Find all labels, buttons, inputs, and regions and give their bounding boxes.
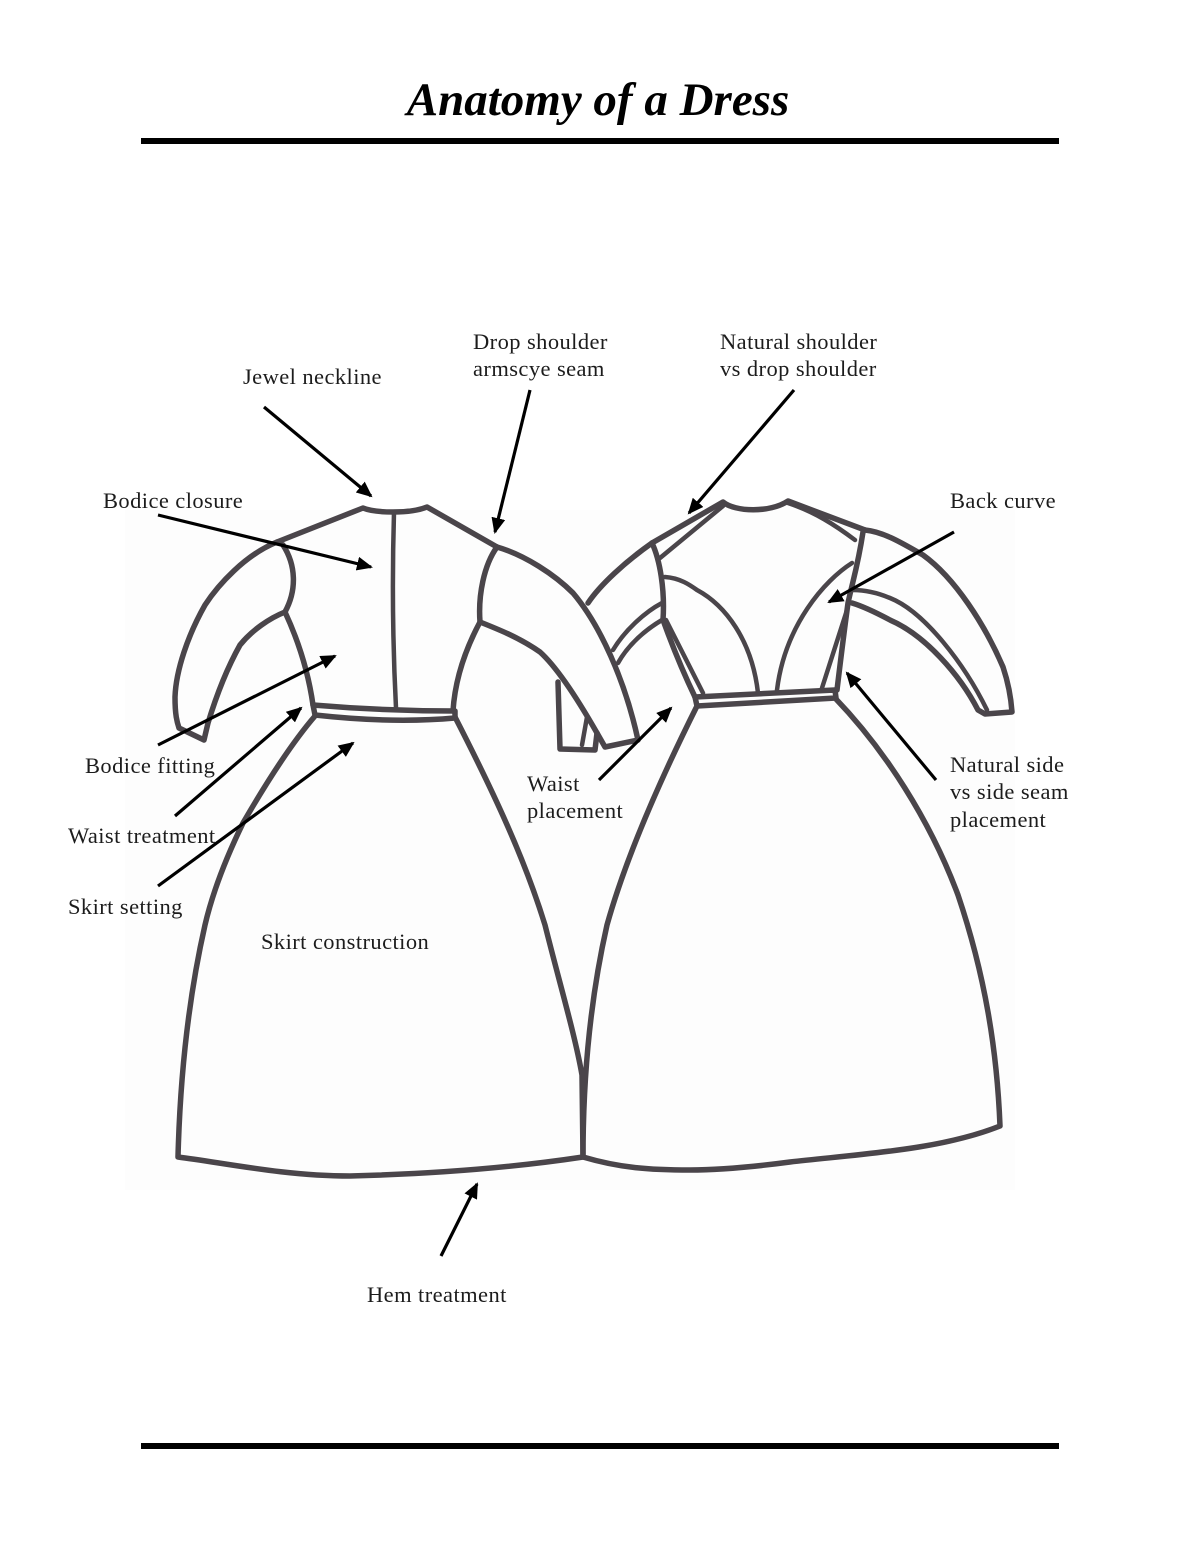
arrow: Bodice fitting	[158, 656, 335, 745]
label: Natural side vs side seam placement: Natural side	[950, 752, 1064, 777]
arrow: Drop shoulder	[495, 390, 530, 532]
front view left sleeve	[175, 542, 285, 740]
paper background	[125, 510, 1015, 1190]
dress: front view	[175, 507, 638, 1176]
arrow: Natural side	[847, 673, 936, 780]
title: Anatomy of a Dress	[404, 74, 789, 126]
label: Drop shoulder armscye seam: Drop shoulder	[473, 329, 608, 354]
arrow: Hem treatment	[441, 1184, 477, 1256]
arrow: Jewel neckline	[264, 407, 371, 496]
arrow: Bodice closure	[158, 515, 371, 567]
front view right sleeve	[480, 547, 638, 747]
label: Hem treatment: Hem treatment	[367, 1282, 507, 1307]
label: Natural shoulder vs drop shoulder: Natural shoulder	[720, 329, 877, 354]
arrow: Skirt setting	[158, 743, 353, 886]
label: Waist treatment: Waist treatment	[68, 823, 216, 848]
label: Skirt setting: Skirt setting	[68, 894, 183, 919]
front view skirt	[178, 716, 583, 1176]
back view right sleeve	[852, 530, 1012, 714]
label: Skirt construction: Skirt construction	[261, 929, 429, 954]
arrow: Waist treatment	[175, 708, 301, 816]
label: Waist placement: Waist	[527, 771, 580, 796]
label: Bodice closure: Bodice closure	[103, 488, 243, 513]
bottom rule	[141, 1443, 1059, 1449]
label: Natural shoulder vs drop shoulder: vs drop shoulder	[720, 356, 877, 381]
front view bodice	[277, 507, 497, 547]
label: Natural side vs side seam placement: placement	[950, 807, 1047, 832]
label: Jewel neckline: Jewel neckline	[243, 364, 382, 389]
front view waistband	[313, 705, 455, 720]
arrow: Natural shoulder	[689, 390, 794, 513]
label: Bodice fitting: Bodice fitting	[85, 753, 215, 778]
label: Natural side vs side seam placement: vs side seam	[950, 779, 1069, 804]
label: Waist placement: placement	[527, 798, 624, 823]
back view waistband	[695, 690, 836, 706]
back view skirt	[583, 698, 1000, 1170]
dress: back view	[558, 501, 1012, 1170]
arrow: Waist placement	[599, 708, 671, 780]
label: Drop shoulder armscye seam: armscye seam	[473, 356, 605, 381]
top rule	[141, 138, 1059, 144]
label: Back curve: Back curve	[950, 488, 1056, 513]
arrow: Back curve	[829, 532, 954, 602]
back view bodice	[652, 501, 865, 543]
back view left sleeve	[588, 543, 652, 603]
